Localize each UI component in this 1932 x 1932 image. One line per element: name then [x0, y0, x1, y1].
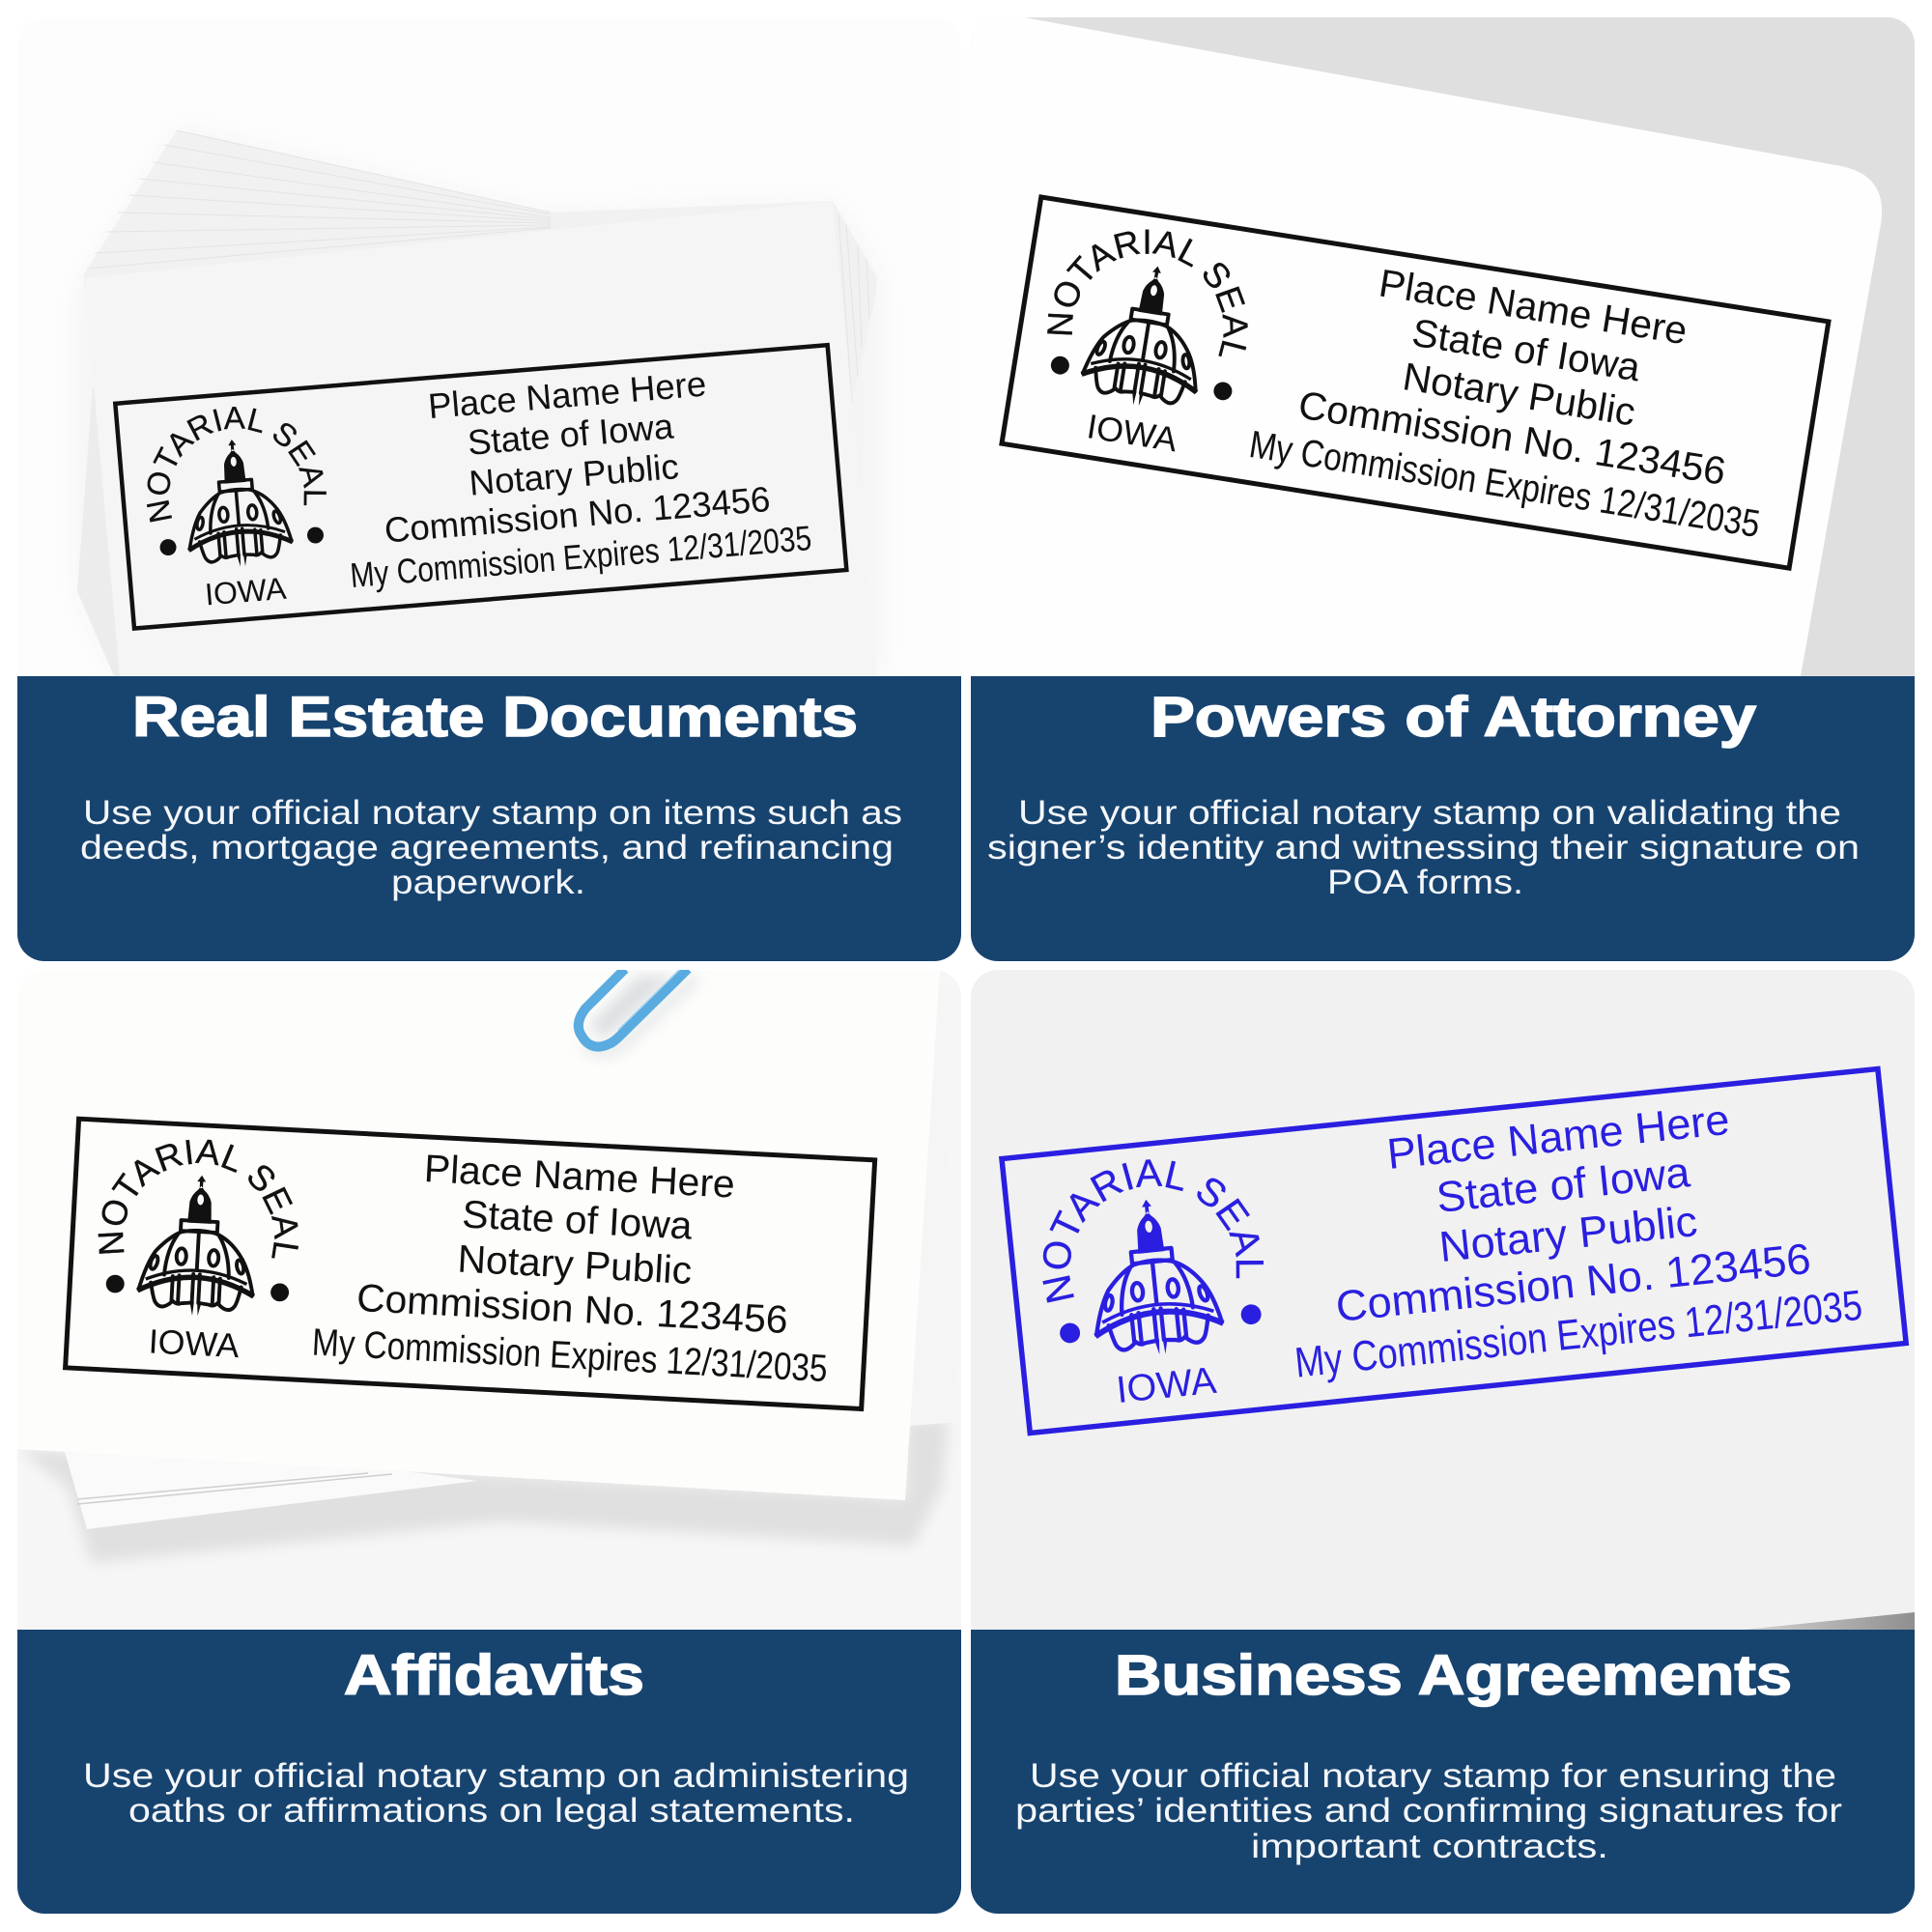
photo: grey sliver at paper edge	[1744, 1612, 1915, 1630]
photo: white sheet	[971, 17, 1882, 676]
stamp text lines: My Commission Expires 12/31/2035	[349, 518, 813, 595]
stamp border	[66, 1119, 875, 1409]
stamp text lines: State of Iowa	[461, 1192, 694, 1248]
stamp text lines: Place Name Here	[427, 364, 708, 426]
stamp text lines: Notary Public	[468, 446, 680, 503]
caption band	[971, 1630, 1915, 1914]
stamp text lines: Notary Public	[457, 1236, 693, 1293]
caption band	[971, 676, 1915, 961]
description	[80, 794, 902, 901]
stamp text lines	[352, 376, 811, 593]
seal: Notarial Seal	[99, 1140, 298, 1358]
description: Use your official notary stamp for ensuring the	[1030, 1757, 1836, 1795]
seal: Notarial Seal: IOWA	[204, 571, 288, 611]
seal: Notarial Seal: NOTARIAL SEAL	[147, 407, 327, 523]
photo: stack of paper	[77, 129, 881, 676]
seal: Notarial Seal	[1047, 230, 1248, 452]
heading: Real Estate Documents	[132, 686, 858, 749]
icon: capitol dome	[1094, 1200, 1225, 1354]
stamp impression	[112, 342, 849, 631]
heading: Business Agreements	[1115, 1644, 1792, 1707]
stamp text lines	[1296, 1111, 1861, 1383]
stamp border	[115, 345, 846, 629]
icon: capitol dome	[136, 1173, 260, 1319]
description: important contracts.	[1251, 1828, 1608, 1865]
seal: Notarial Seal: IOWA	[1085, 407, 1180, 459]
icon: blue paperclip	[579, 969, 697, 1053]
stamp text lines: Place Name Here	[423, 1146, 736, 1207]
stamp border	[1002, 197, 1829, 568]
description	[988, 800, 1857, 895]
stamp text lines: Place Name Here	[1384, 1094, 1732, 1179]
description: parties’ identities and confirming signatures for	[1015, 1792, 1842, 1830]
description: Use your official notary stamp on items such as	[83, 794, 902, 832]
panel: Real Estate Documents	[17, 129, 961, 961]
stamp text lines: Commission No. 123456	[383, 479, 772, 551]
stamp text lines: Commission No. 123456	[1295, 383, 1729, 494]
caption band	[17, 676, 961, 961]
caption band	[17, 1630, 961, 1914]
stamp text lines: Commission No. 123456	[1333, 1234, 1813, 1331]
description: POA forms.	[1327, 864, 1523, 901]
description: Use your official notary stamp on validating the	[1018, 794, 1841, 832]
seal: Notarial Seal: NOTARIAL SEAL	[99, 1140, 298, 1259]
panel: Powers of Attorney	[971, 17, 1915, 961]
panel: Business Agreements	[971, 970, 1915, 1914]
description	[1015, 1757, 1842, 1865]
description: Use your official notary stamp on administering	[83, 1757, 909, 1795]
stamp text lines: Notary Public	[1400, 354, 1638, 435]
seal: Notarial Seal: IOWA	[1115, 1359, 1219, 1411]
stamp text lines: State of Iowa	[466, 406, 675, 463]
stamp text lines: My Commission Expires 12/31/2035	[1246, 423, 1763, 546]
stamp text lines: Notary Public	[1436, 1196, 1699, 1271]
description: oaths or affirmations on legal statements.	[128, 1792, 855, 1830]
stamp impression	[62, 1117, 877, 1412]
seal: Notarial Seal	[147, 407, 327, 605]
stamp text lines	[1250, 270, 1759, 537]
icon: capitol dome	[1080, 267, 1198, 406]
stamp border	[1002, 1069, 1906, 1433]
panel: Affidavits	[17, 970, 961, 1914]
seal: Notarial Seal: NOTARIAL SEAL	[1042, 1159, 1264, 1303]
seal: Notarial Seal: NOTARIAL SEAL	[1047, 230, 1248, 357]
description	[83, 1757, 909, 1830]
stamp text lines: Place Name Here	[1376, 261, 1690, 353]
description: deeds, mortgage agreements, and refinancing	[80, 829, 894, 867]
description: paperwork.	[391, 864, 585, 901]
heading: Affidavits	[344, 1644, 644, 1707]
stamp text lines: My Commission Expires 12/31/2035	[311, 1321, 829, 1390]
stamp impression	[999, 194, 1832, 571]
stamp impression	[999, 1066, 1909, 1435]
heading: Powers of Attorney	[1151, 686, 1756, 749]
photo: papers and shadow	[29, 1423, 950, 1564]
stamp text lines: State of Iowa	[1435, 1148, 1692, 1222]
description: signer’s identity and witnessing their signature on	[987, 829, 1860, 867]
seal: Notarial Seal	[1042, 1159, 1264, 1403]
seal: Notarial Seal: IOWA	[148, 1322, 241, 1365]
icon: capitol dome	[187, 440, 294, 566]
stamp text lines: Commission No. 123456	[355, 1275, 789, 1342]
stamp text lines: State of Iowa	[1409, 310, 1644, 389]
stamp text lines	[314, 1155, 826, 1381]
